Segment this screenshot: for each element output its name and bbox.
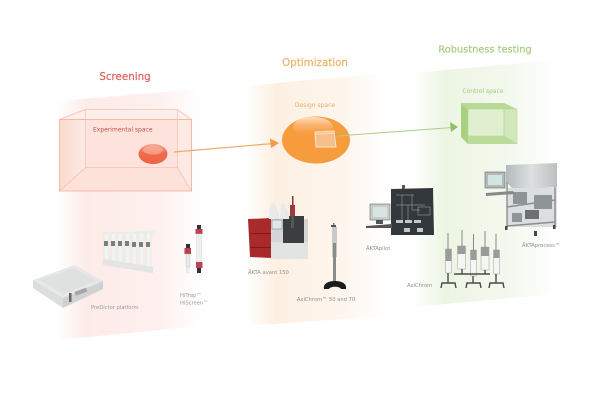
panel: optimization background [245,73,386,326]
label: Design space: Design space [295,102,335,109]
title: Optimization: Optimization [282,57,348,69]
arrow: screening to optimization [174,138,279,152]
label: AKTA avant 150: ÄKTA avant 150 [248,269,289,276]
design space ellipse [282,116,350,164]
panel: robustness testing background [413,60,556,307]
label: HiTrap and HiScreen: HiTrap™ [180,293,202,299]
label: HiTrap and HiScreen [180,293,208,306]
label: HiTrap and HiScreen: HiScreen™ [180,300,208,306]
label: AxiChrom: AxiChrom [407,283,432,289]
device: AKTA avant 150 [248,196,308,259]
label: Control space: Control space [462,88,504,95]
device: AKTApilot [366,185,434,235]
label: Experimental space: Experimental space [93,126,153,134]
ellipse: experimental region [138,144,168,164]
label: AKTApilot: ÄKTApilot [366,245,390,252]
title: Screening: Screening [99,71,151,83]
label: AKTAprocess: ÄKTAprocess™ [522,242,560,249]
device: HiTrap and HiScreen columns [184,225,202,273]
device: AKTAprocess [485,163,557,236]
experimental space box [59,109,192,191]
title: Robustness testing: Robustness testing [438,44,532,56]
panel: screening background [58,89,200,340]
label: PreDictor platform: PreDictor platform [91,305,139,311]
device: AxiChrom process columns [441,230,504,288]
device: AxiChrom 50 and 70 [324,223,346,289]
arrow: optimization to robustness [337,122,458,136]
device: PreDictor plate [33,265,103,308]
control space box [461,103,517,144]
label: AxiChrom 50 and 70: AxiChrom™ 50 and 70 [297,297,355,303]
device: PreDictor cartridges [103,230,155,273]
